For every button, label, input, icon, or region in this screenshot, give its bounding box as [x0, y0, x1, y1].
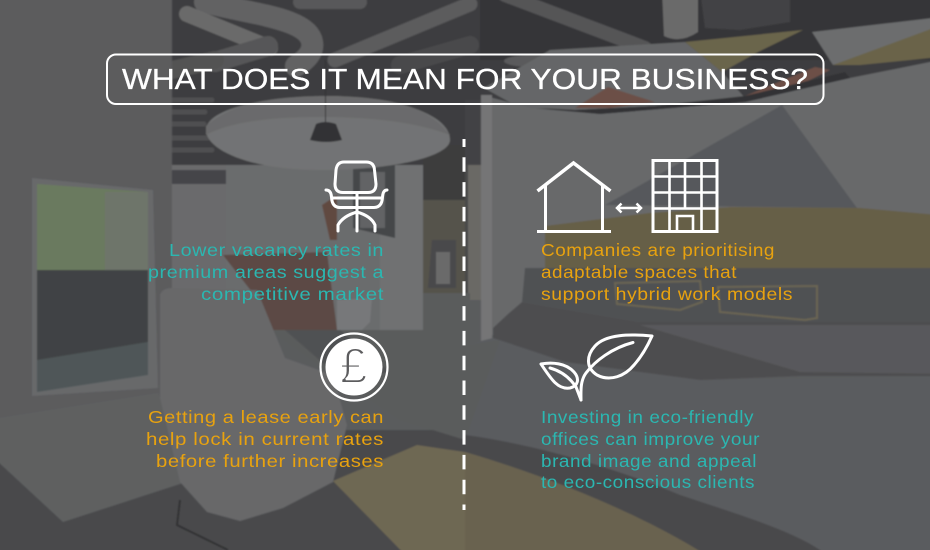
text: vacancy rates — [148, 240, 384, 304]
text: eco-friendly offices: brand image and appeal — [541, 451, 757, 471]
text: vacancy rates: competitive market — [201, 284, 384, 304]
text: lease early: Getting a lease early can — [148, 407, 384, 427]
panel: eco-friendly offices — [541, 335, 760, 492]
ceiling disc — [206, 96, 450, 170]
text: eco-friendly offices: to eco-conscious clients — [541, 472, 755, 492]
text: lease early: before further increases — [156, 451, 384, 471]
icon: pound coin — [320, 334, 388, 400]
ceiling panels — [685, 30, 803, 72]
text: vacancy rates: Lower vacancy rates in — [169, 240, 384, 260]
panel: adaptable spaces — [537, 160, 793, 304]
reception desk — [223, 252, 337, 330]
text: adaptable spaces: support hybrid work models — [541, 284, 793, 304]
floor — [0, 430, 465, 550]
wall base and lower-left ledge — [0, 393, 183, 522]
text: adaptable spaces: adaptable spaces that — [541, 262, 737, 282]
panel: lease early — [146, 334, 388, 471]
ceiling — [172, 0, 930, 175]
armchair — [160, 288, 347, 521]
icon: office chair — [326, 162, 387, 231]
text: eco-friendly offices: Investing in eco-friendly — [541, 407, 754, 427]
icon: plant leaves — [541, 335, 652, 400]
icon: house to office — [537, 160, 717, 232]
icon: pound coin: £ — [340, 338, 367, 394]
text: adaptable spaces: Companies are prioritising — [541, 240, 775, 260]
text: lease early: help lock in current rates — [146, 429, 384, 449]
left wall — [0, 0, 172, 430]
text: eco-friendly offices — [541, 407, 760, 492]
column zone — [172, 165, 226, 300]
text: adaptable spaces — [541, 240, 793, 304]
text: vacancy rates: premium areas suggest a — [148, 262, 384, 282]
stage and steps — [522, 268, 930, 322]
dashed divider — [462, 139, 466, 510]
wall right — [482, 58, 930, 335]
title text: WHAT DOES IT MEAN FOR YOUR BUSINESS? — [122, 64, 808, 96]
window — [32, 178, 158, 396]
text: eco-friendly offices: offices can improve your — [541, 429, 760, 449]
title frame — [107, 54, 824, 104]
panel: vacancy rates — [148, 162, 387, 304]
title — [107, 54, 824, 104]
text: lease early — [146, 407, 384, 471]
carpet and wood right — [465, 435, 850, 550]
